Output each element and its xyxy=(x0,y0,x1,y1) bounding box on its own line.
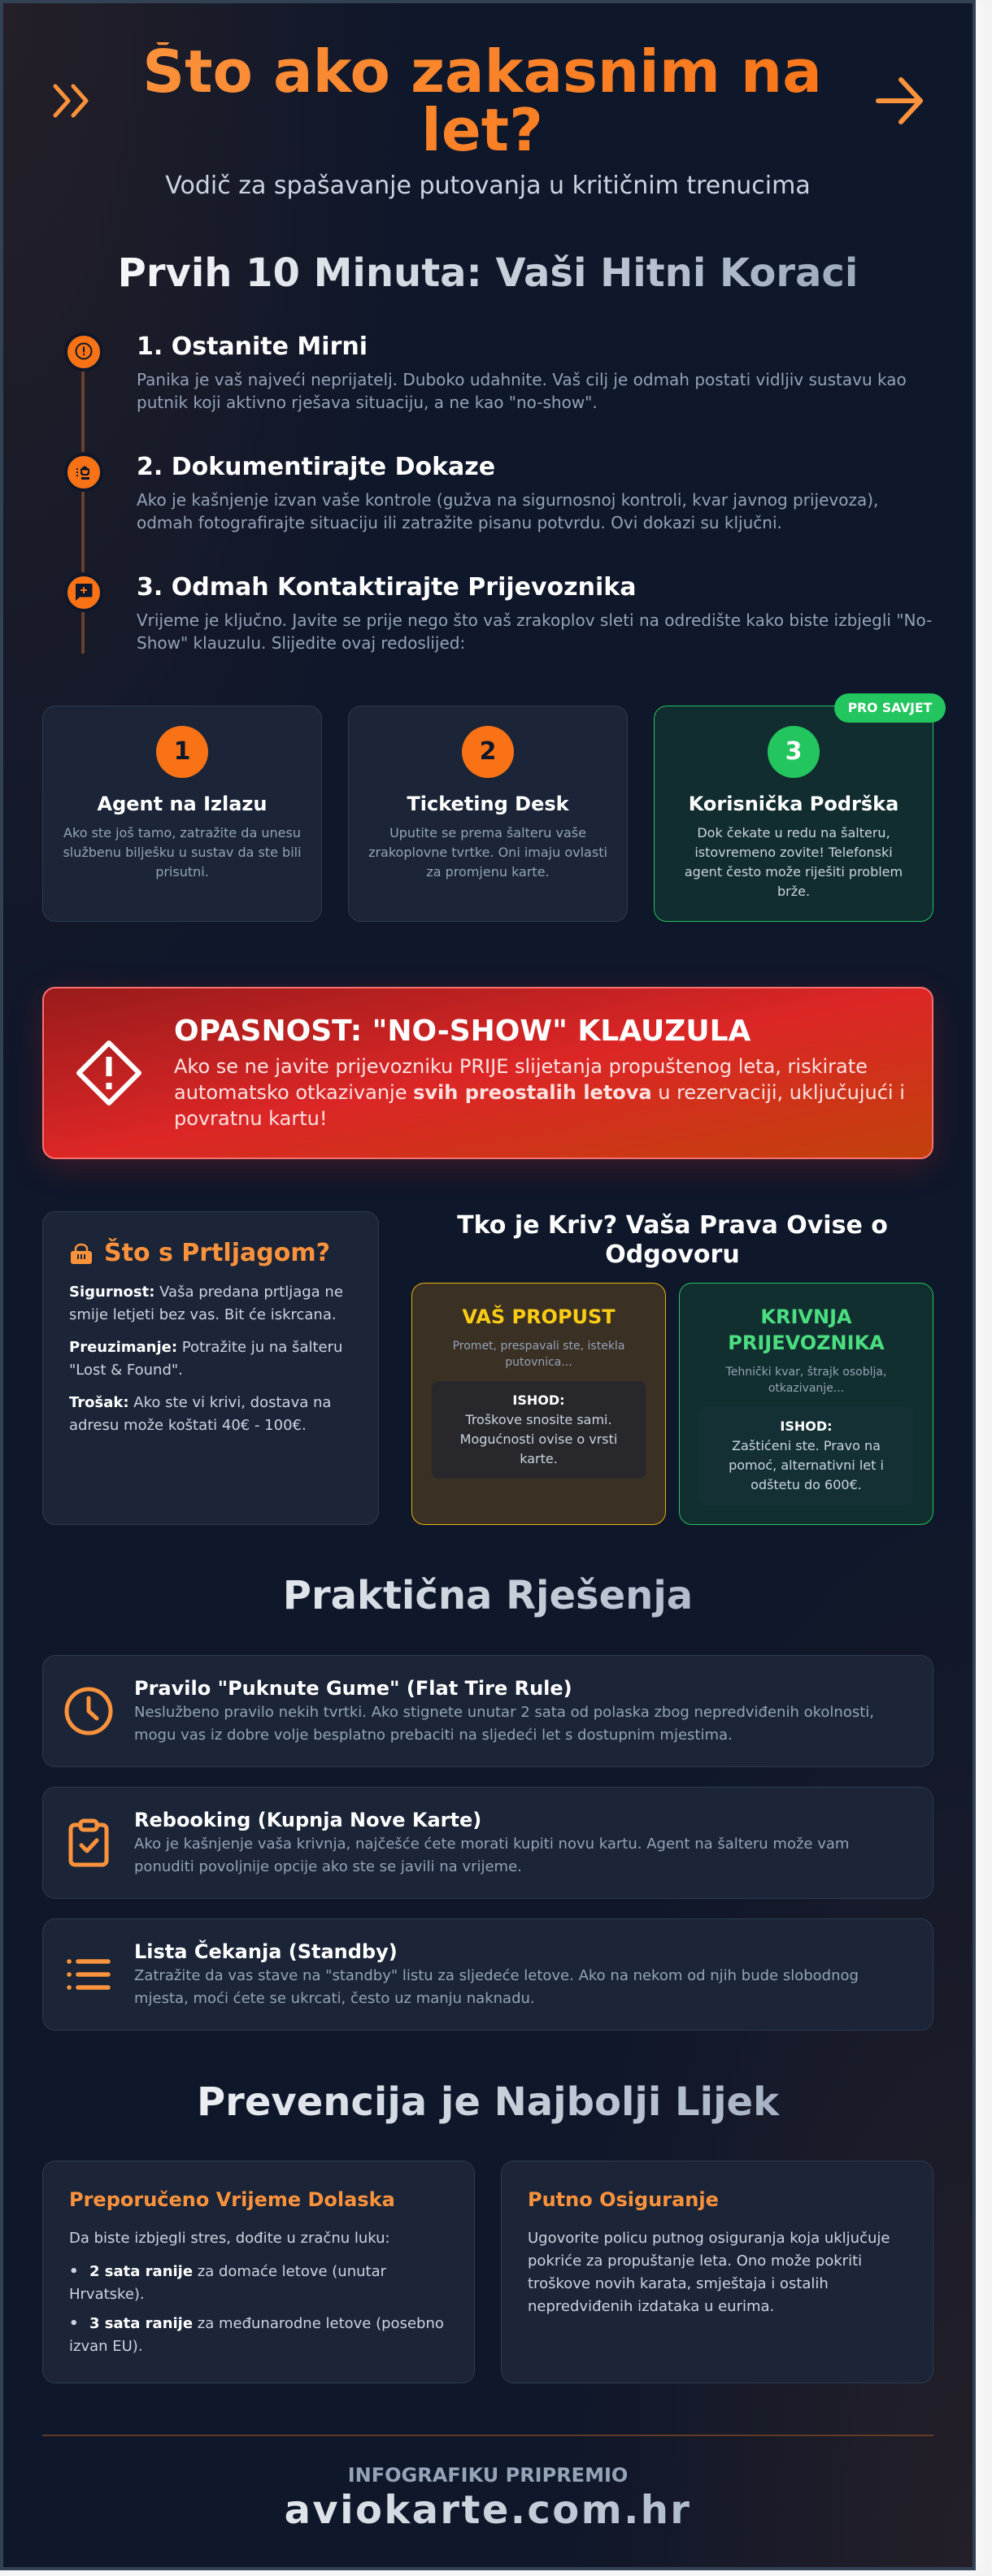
carrier fault title: KRIVNJA xyxy=(760,1305,852,1328)
your fault causes xyxy=(453,1340,624,1369)
pro tip badge xyxy=(834,693,946,723)
baggage: security: Sigurnost: Vaša predana prtljaga ne xyxy=(69,1284,343,1301)
footer site name: aviokarte.com.hr xyxy=(285,2487,691,2533)
footer label: INFOGRAFIKU PRIPREMIO xyxy=(348,2464,628,2487)
step 1 title: 1. Ostanite Mirni xyxy=(137,332,368,361)
text: Ako je kašnjenje vaša krivnja, najčešće ćete morati kupiti novu kartu. Agent na šalteru može vam xyxy=(134,1835,849,1853)
step 1 text xyxy=(137,370,907,412)
panel: flat tire rule xyxy=(42,1655,933,1767)
baggage heading: Što s Prtljagom? xyxy=(104,1239,330,1267)
text: mjesta, moći ćete se ukrcati, često uz manju naknadu. xyxy=(134,1990,535,2007)
number badge 1: 1 xyxy=(174,737,190,766)
list item: international: izvan EU). xyxy=(69,2338,143,2355)
your fault outcome: karte. xyxy=(520,1451,558,1466)
panel: ticketing desk xyxy=(348,706,628,922)
card text: službenu bilješku u sustav da ste bili xyxy=(63,845,302,860)
carrier fault causes: Tehnički kvar, štrajk osoblja, xyxy=(726,1366,886,1379)
panel: rebooking xyxy=(42,1787,933,1899)
step 3 text xyxy=(137,610,932,653)
list item: international: 3 sata ranije za međunarodne letove (posebno xyxy=(89,2315,444,2332)
carrier fault title: PRIJEVOZNIKA xyxy=(728,1331,885,1354)
title: Pravilo "Puknute Gume" (Flat Tire Rule) xyxy=(134,1677,572,1700)
fault heading: Tko je Kriv? Vaša Prava Ovise o xyxy=(457,1211,888,1240)
icon: arrow right xyxy=(876,77,923,124)
text: nepredviđenih izdataka u eurima. xyxy=(528,2298,774,2315)
panel: recommended arrival time xyxy=(42,2161,475,2383)
step 3 text: Vrijeme je ključno. Javite se prije nego što vaš zrakoplov sleti na odredište kako biste izbjegli "No- xyxy=(137,610,932,630)
section heading: first 10 minutes: Prvih 10 Minuta: Vaši Hitni Koraci xyxy=(118,250,858,296)
text: ponuditi povoljnije opcije ako ste se javili na vrijeme. xyxy=(134,1858,522,1875)
fault heading xyxy=(457,1211,888,1269)
icon: double chevron right xyxy=(54,85,89,117)
text xyxy=(528,2230,890,2315)
icon: clipboard check xyxy=(68,1819,109,1866)
your fault causes: Promet, prespavali ste, istekla xyxy=(453,1340,624,1353)
step 3 icon: chat plus xyxy=(64,573,103,612)
text: Zatražite da vas stave na "standby" listu za sljedeće letove. Ako na nekom od njih bude slobodnog xyxy=(134,1967,859,1984)
step 2 title: 2. Dokumentirajte Dokaze xyxy=(137,453,495,481)
panel: baggage xyxy=(42,1211,379,1525)
card title: Korisnička Podrška xyxy=(689,793,898,815)
timeline line segment xyxy=(81,611,85,654)
text: Ugovorite policu putnog osiguranja koja uključuje xyxy=(528,2230,890,2247)
card title: Agent na Izlazu xyxy=(98,793,267,815)
icon: list xyxy=(67,1959,111,1990)
section heading: practical solutions: Praktična Rješenja xyxy=(283,1573,693,1618)
text: troškove novih karata, smještaja i ostalih xyxy=(528,2275,829,2292)
carrier fault causes: otkazivanje... xyxy=(768,1382,844,1395)
icon: clock xyxy=(65,1688,112,1735)
text: Neslužbeno pravilo nekih tvrtki. Ako stignete unutar 2 sata od polaska zbog nepredviđenih okolnosti, xyxy=(134,1704,874,1721)
timeline line segment xyxy=(81,491,85,572)
danger title: OPASNOST: "NO-SHOW" KLAUZULA xyxy=(174,1014,751,1048)
text: mogu vas iz dobre volje besplatno prebaciti na sljedeći let s dostupnim mjestima. xyxy=(134,1727,733,1744)
step 3 text: Show" klauzulu. Slijedite ovaj redoslijed: xyxy=(137,633,465,653)
danger text xyxy=(174,1055,905,1130)
section heading: practical solutions xyxy=(42,1572,933,1619)
text xyxy=(134,1967,859,2007)
title xyxy=(142,42,822,159)
panel: customer support xyxy=(654,706,933,922)
card text: Dok čekate u redu na šalteru, xyxy=(697,825,890,841)
timeline line segment xyxy=(81,371,85,452)
panel: travel insurance xyxy=(501,2161,933,2383)
danger text: Ako se ne javite prijevozniku PRIJE slijetanja propuštenog leta, riskirate xyxy=(174,1055,868,1078)
title: Preporučeno Vrijeme Dolaska xyxy=(69,2188,395,2211)
carrier fault outcome: Zaštićeni ste. Pravo na xyxy=(732,1438,881,1453)
panel: your fault xyxy=(411,1283,666,1525)
baggage: pickup: Preuzimanje: Potražite ju na šalteru xyxy=(69,1339,342,1356)
timeline steps xyxy=(64,332,932,654)
carrier fault title xyxy=(728,1305,885,1354)
step 2 text: Ako je kašnjenje izvan vaše kontrole (gužva na sigurnosnoj kontroli, kvar javnog prijevoza), xyxy=(137,490,878,510)
footer xyxy=(42,2435,933,2533)
intro text: Da biste izbjegli stres, dođite u zračnu luku: xyxy=(69,2230,390,2247)
card title: Ticketing Desk xyxy=(407,793,569,815)
card text: prisutni. xyxy=(155,864,209,880)
card text: za promjenu karte. xyxy=(426,864,550,880)
step 3 title: 3. Odmah Kontaktirajte Prijevoznika xyxy=(137,573,636,602)
danger text: povratnu kartu! xyxy=(174,1107,327,1130)
icon: luggage lock xyxy=(71,1244,92,1264)
step 2 icon: documents xyxy=(64,453,103,492)
carrier fault outcome: ISHOD: xyxy=(780,1418,833,1434)
step 1 text: Panika je vaš najveći neprijatelj. Duboko udahnite. Vaš cilj je odmah postati vidljiv sustavu kao xyxy=(137,370,907,389)
baggage: cost: Trošak: Ako ste vi krivi, dostava na xyxy=(69,1394,331,1411)
list item: domestic: 2 sata ranije za domaće letove (unutar xyxy=(89,2263,386,2280)
list item: domestic: Hrvatske). xyxy=(69,2286,145,2303)
title: Putno Osiguranje xyxy=(528,2188,719,2211)
title: Lista Čekanja (Standby) xyxy=(134,1940,398,1963)
section heading: prevention: Prevencija je Najbolji Lijek xyxy=(197,2079,779,2125)
icon: warning diamond xyxy=(76,1040,141,1106)
your fault outcome xyxy=(432,1381,646,1479)
panel: agent at gate xyxy=(42,706,322,922)
step 1 icon: exclamation circle xyxy=(64,332,103,371)
fault heading: Odgovoru xyxy=(605,1240,740,1269)
pro tip badge: PRO SAVJET xyxy=(848,701,932,715)
number badge 1 xyxy=(156,726,208,778)
card text: brže. xyxy=(777,884,810,899)
number badge 2: 2 xyxy=(480,737,496,766)
title: Što ako zakasnim na xyxy=(142,37,822,106)
step 2 text: odmah fotografirajte situaciju ili zatražite pisanu potvrdu. Ovi dokazi su ključni. xyxy=(137,513,782,532)
carrier fault outcome: pomoć, alternativni let i xyxy=(729,1457,884,1473)
card text xyxy=(368,825,607,880)
list item: international xyxy=(69,2315,444,2355)
list item: domestic xyxy=(69,2263,386,2303)
panel: no-show danger xyxy=(42,987,933,1159)
number badge 2 xyxy=(462,726,514,778)
baggage: pickup xyxy=(69,1339,342,1379)
card text xyxy=(685,825,903,899)
text xyxy=(134,1704,874,1744)
your fault outcome: Mogućnosti ovise o vrsti xyxy=(460,1431,617,1447)
baggage: security xyxy=(69,1284,343,1323)
subtitle: Vodič za spašavanje putovanja u kritičnim trenucima xyxy=(165,172,811,200)
danger text: automatsko otkazivanje svih preostalih letova u rezervaciji, uključujući i xyxy=(174,1081,905,1104)
your fault outcome: ISHOD: xyxy=(512,1392,565,1408)
your fault title: VAŠ PROPUST xyxy=(462,1305,616,1328)
number badge 3 xyxy=(768,726,820,778)
baggage: cost: adresu može koštati 40€ - 100€. xyxy=(69,1417,307,1434)
baggage: pickup: "Lost & Found". xyxy=(69,1362,183,1379)
title: let? xyxy=(421,96,543,164)
step 2 text xyxy=(137,490,878,532)
baggage: cost xyxy=(69,1394,331,1434)
card text: istovremeno zovite! Telefonski xyxy=(694,845,893,860)
text: pokriće za propuštanje leta. Ono može pokriti xyxy=(528,2252,862,2270)
header xyxy=(54,37,923,200)
card text: zrakoplovne tvrtke. Oni imaju ovlasti xyxy=(368,845,607,860)
card text: Ako ste još tamo, zatražite da unesu xyxy=(63,825,301,841)
your fault outcome: Troškove snosite sami. xyxy=(465,1412,612,1427)
list item: domestic: • xyxy=(69,2263,79,2280)
card text xyxy=(63,825,302,880)
title: Rebooking (Kupnja Nove Karte) xyxy=(134,1809,481,1831)
carrier fault outcome: odštetu do 600€. xyxy=(751,1477,862,1492)
card text: agent često može riješiti problem xyxy=(685,864,903,880)
carrier fault causes xyxy=(725,1366,886,1395)
list item: international: • xyxy=(69,2315,79,2332)
text xyxy=(134,1835,849,1875)
baggage: security: smije letjeti bez vas. Bit će iskrcana. xyxy=(69,1306,337,1323)
carrier fault outcome xyxy=(699,1407,913,1505)
footer site name xyxy=(42,2487,933,2534)
panel: carrier fault xyxy=(679,1283,933,1525)
number badge 3: 3 xyxy=(785,737,802,766)
step 1 text: putnik koji aktivno rješava situaciju, a ne kao "no-show". xyxy=(137,393,598,412)
card text: Uputite se prema šalteru vaše xyxy=(389,825,586,841)
panel: standby xyxy=(42,1918,933,2031)
your fault causes: putovnica... xyxy=(505,1356,572,1369)
section heading: prevention xyxy=(42,2079,933,2126)
